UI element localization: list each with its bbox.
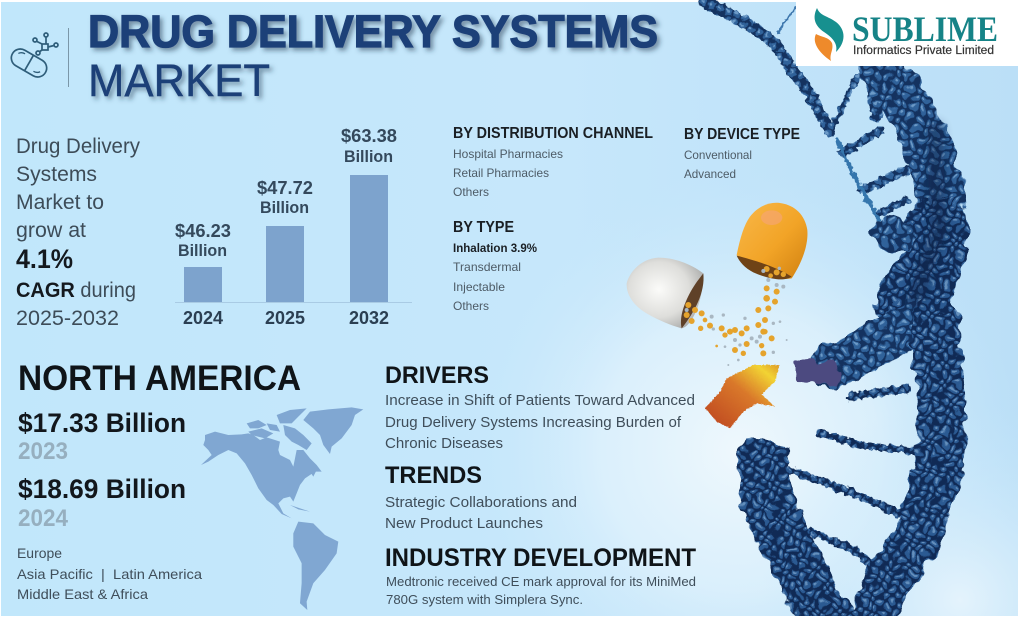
segment: by type: Inhalation 3.9% bbox=[453, 241, 537, 255]
capsule illustration bbox=[627, 203, 807, 428]
logo panel bbox=[796, 0, 1018, 66]
cagr text block: 2025-2032 bbox=[16, 306, 119, 330]
industry development: 780G system with Simplera Sync. bbox=[386, 593, 583, 607]
title bbox=[88, 6, 658, 106]
segment: by distribution channel: Others bbox=[453, 185, 489, 199]
segment: by distribution channel: BY DISTRIBUTION CHANNEL bbox=[453, 125, 653, 142]
region heading: NORTH AMERICA bbox=[18, 359, 301, 398]
bar 2032: Billion bbox=[344, 147, 393, 166]
trends: New Product Launches bbox=[385, 515, 543, 532]
segment: by type: Injectable bbox=[453, 280, 505, 294]
cagr text block: Systems bbox=[16, 162, 97, 186]
bar 2032: 2032 bbox=[349, 308, 389, 328]
trends: Strategic Collaborations and bbox=[385, 494, 577, 511]
bar 2032: $63.38 bbox=[341, 126, 397, 146]
divider bbox=[68, 28, 70, 87]
cagr text block: CAGR during bbox=[16, 278, 136, 302]
segment: by distribution channel bbox=[453, 125, 653, 199]
other regions: Asia Pacific | Latin America bbox=[17, 566, 202, 582]
bar 2024: 2024 bbox=[183, 308, 223, 328]
bar 2025 bbox=[257, 178, 313, 328]
cagr text block bbox=[16, 134, 140, 330]
segment: by device type: Conventional bbox=[684, 148, 752, 162]
drivers: Increase in Shift of Patients Toward Advanced bbox=[385, 392, 695, 409]
other regions: Europe bbox=[17, 545, 62, 561]
segment: by type bbox=[453, 219, 537, 313]
silver capsule half bbox=[627, 258, 704, 328]
segment: by device type: BY DEVICE TYPE bbox=[684, 126, 800, 143]
segment: by type: Transdermal bbox=[453, 260, 521, 274]
trends bbox=[385, 462, 577, 532]
icon: capsule and molecule bbox=[8, 33, 58, 80]
region values: $18.69 Billion bbox=[18, 474, 186, 504]
trends: TRENDS bbox=[385, 462, 482, 489]
drivers: Drug Delivery Systems Increasing Burden of bbox=[385, 414, 682, 431]
cagr text block: Market to bbox=[16, 190, 104, 214]
drivers: Chronic Diseases bbox=[385, 435, 503, 452]
logo wordmark: SUBLIME bbox=[852, 9, 998, 49]
cagr text block: Drug Delivery bbox=[16, 134, 140, 158]
title: MARKET bbox=[88, 55, 270, 106]
logo flame icon bbox=[815, 8, 844, 61]
segment: by type: BY TYPE bbox=[453, 219, 514, 236]
segment: by distribution channel: Retail Pharmacies bbox=[453, 166, 549, 180]
region values: $17.33 Billion bbox=[18, 408, 186, 438]
industry development: Medtronic received CE mark approval for its MiniMed bbox=[386, 575, 696, 589]
bar 2025: 2025 bbox=[265, 308, 305, 328]
bar 2032 bbox=[341, 126, 397, 328]
industry development: INDUSTRY DEVELOPMENT bbox=[385, 544, 696, 572]
logo tagline: Informatics Private Limited bbox=[853, 45, 994, 57]
powder pile bbox=[705, 365, 779, 428]
bar 2024: $46.23 bbox=[175, 221, 231, 241]
industry development bbox=[385, 544, 696, 607]
bar 2024 bbox=[175, 221, 231, 328]
segment: by device type: Advanced bbox=[684, 167, 736, 181]
cagr text block: grow at bbox=[16, 218, 86, 242]
segment: by device type bbox=[684, 126, 800, 181]
bar 2024: Billion bbox=[178, 241, 227, 260]
segment: by type: Others bbox=[453, 299, 489, 313]
drivers bbox=[385, 362, 695, 452]
title: DRUG DELIVERY SYSTEMS bbox=[88, 6, 658, 57]
falling particles bbox=[684, 266, 786, 369]
segment: by distribution channel: Hospital Pharmacies bbox=[453, 147, 563, 161]
region values: 2023 bbox=[18, 438, 68, 465]
region values bbox=[18, 408, 186, 532]
drivers: DRIVERS bbox=[385, 362, 489, 389]
cagr text block: 4.1% bbox=[16, 244, 73, 274]
other regions: Middle East & Africa bbox=[17, 586, 148, 602]
dna helix illustration bbox=[705, 3, 942, 623]
bar 2025: $47.72 bbox=[257, 178, 313, 198]
orange capsule half bbox=[737, 203, 807, 279]
bar 2025: Billion bbox=[260, 198, 309, 217]
region values: 2024 bbox=[18, 505, 69, 532]
other regions bbox=[17, 545, 202, 602]
bar chart bbox=[175, 126, 412, 328]
map: americas bbox=[201, 407, 363, 610]
